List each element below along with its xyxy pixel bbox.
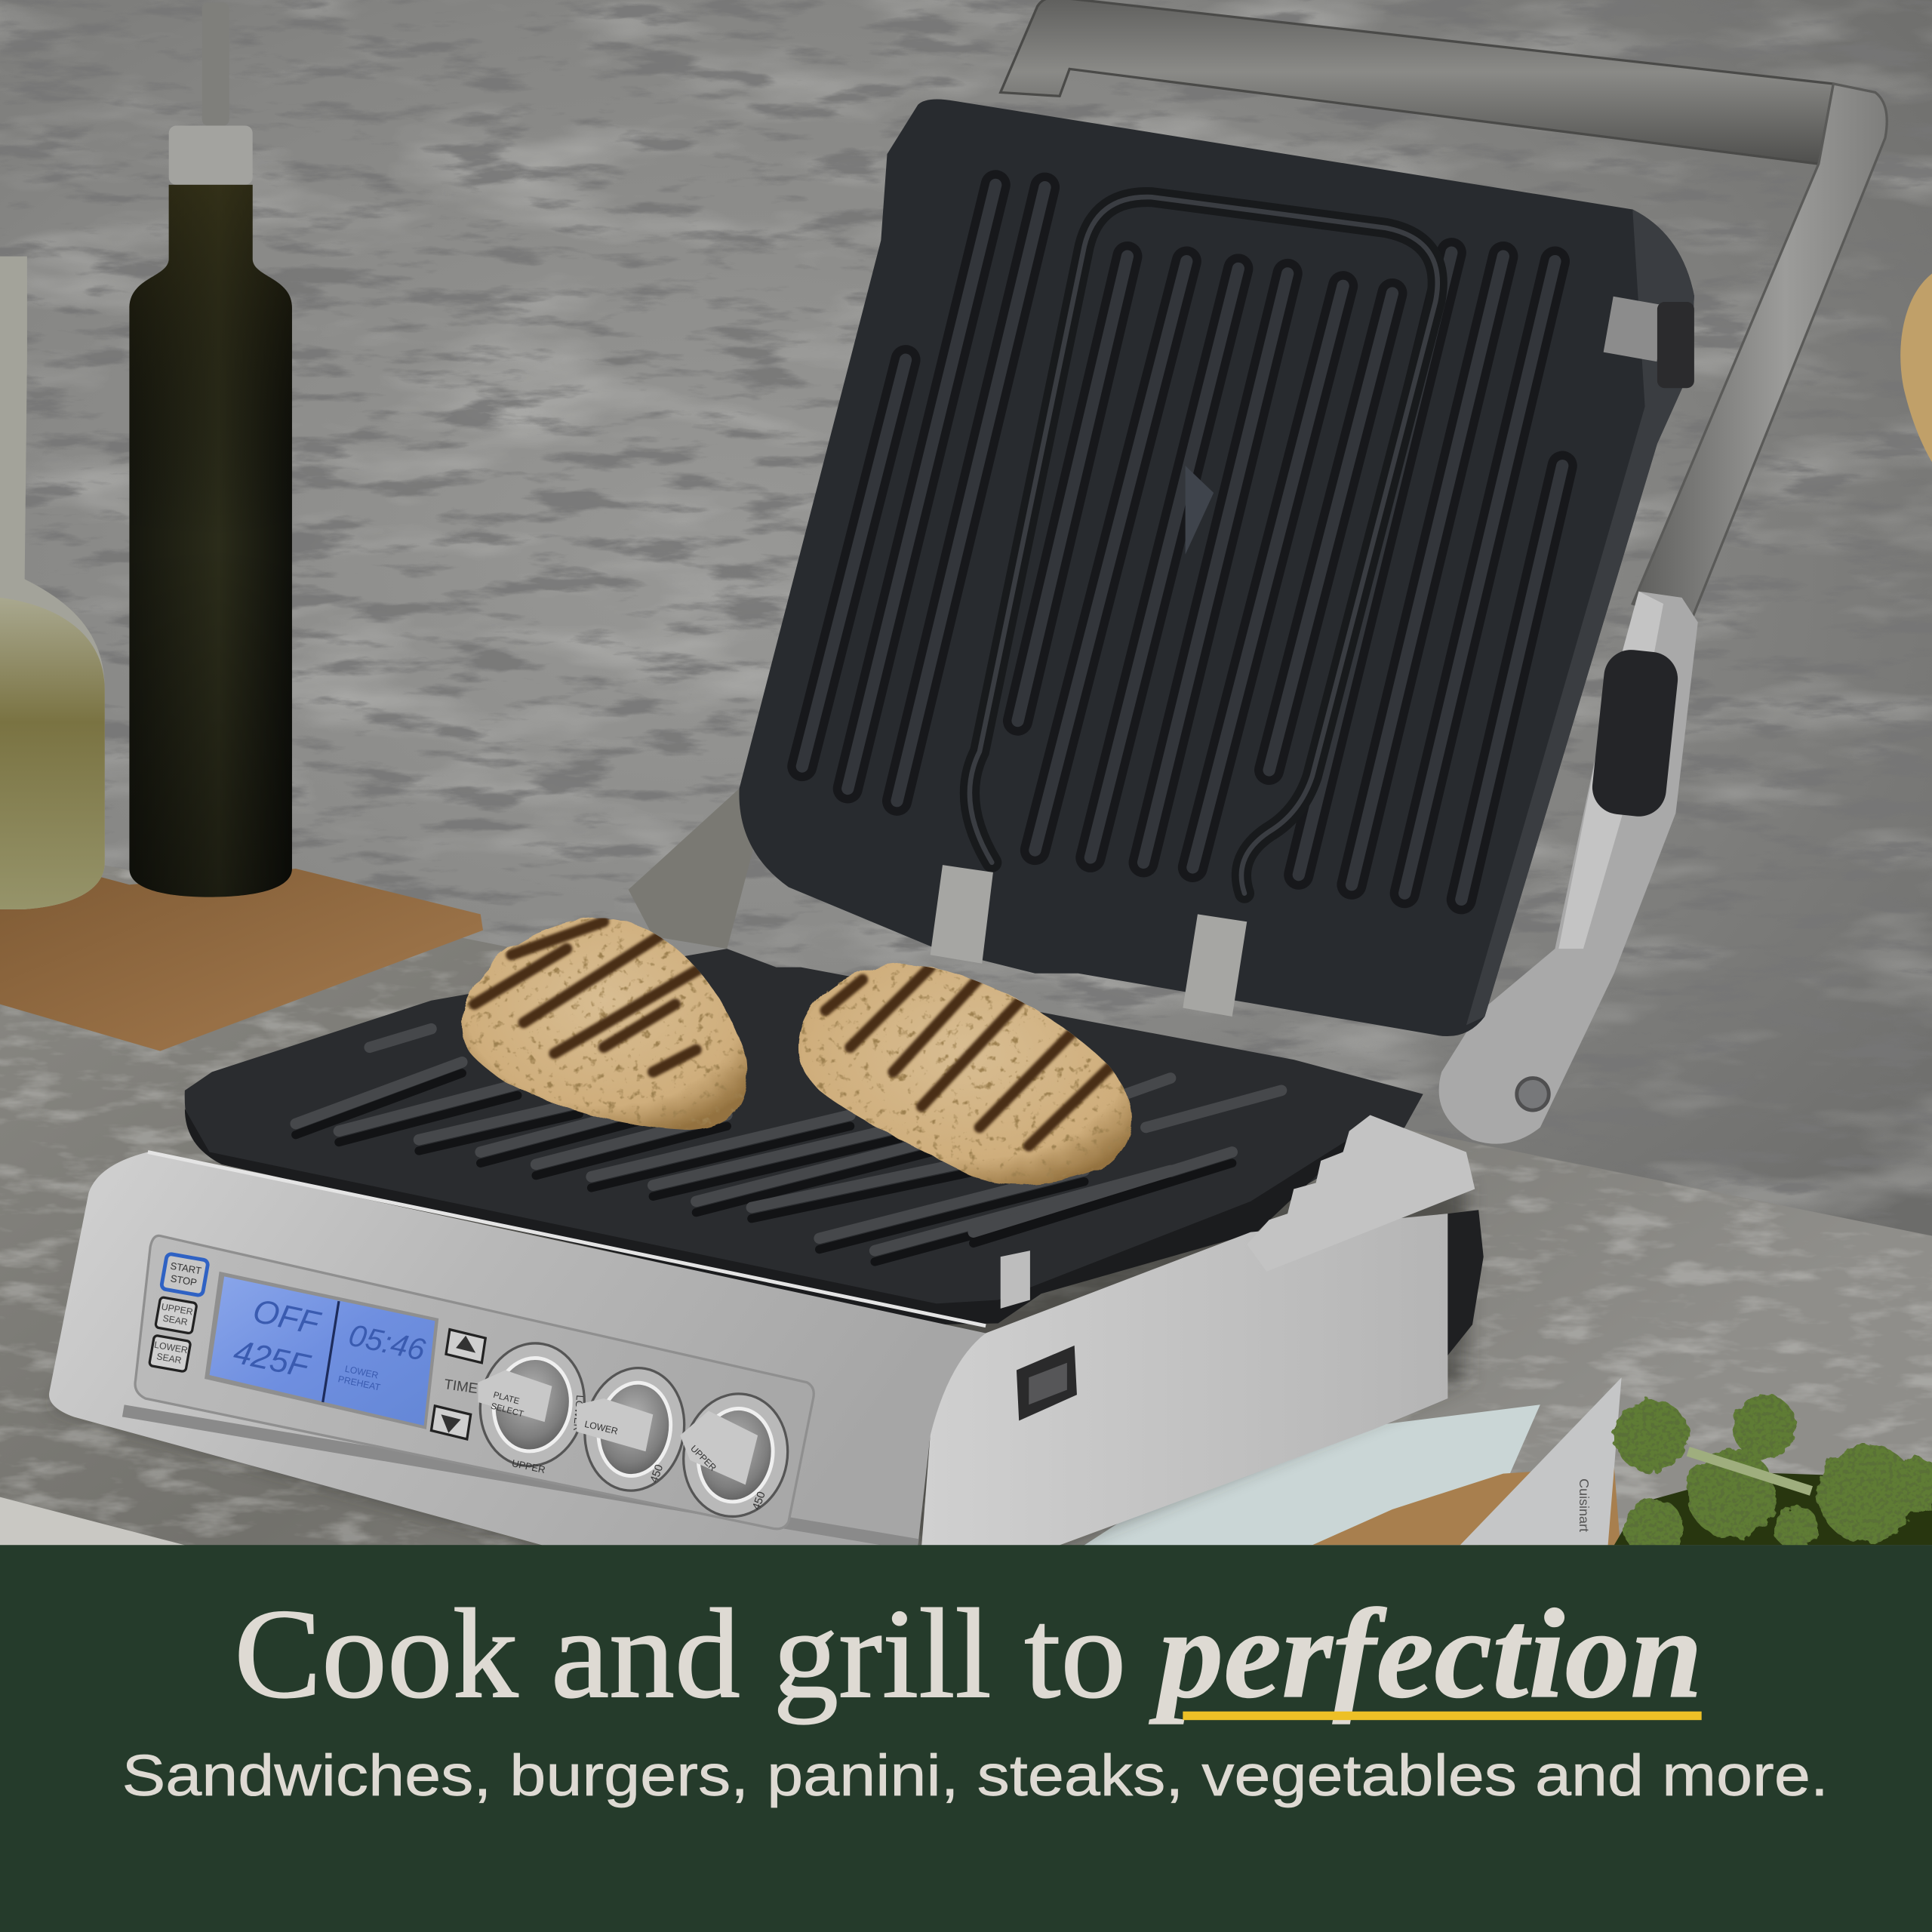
start stop button [161, 1254, 208, 1296]
lower temperature knob [575, 1360, 694, 1499]
lower temperature knob: 450 [648, 1463, 666, 1484]
LCD display: LOWER [344, 1364, 380, 1381]
headline: Cook and grill to [234, 1583, 1126, 1724]
glass oil bottle [0, 257, 105, 909]
upper sear button [155, 1297, 197, 1334]
upper temperature knob [674, 1386, 797, 1524]
wall [0, 0, 1932, 1244]
chef knife [1460, 1377, 1622, 1545]
lower cooking plate [185, 949, 1423, 1324]
plate select knob [471, 1335, 594, 1475]
timer buttons [431, 1330, 489, 1439]
plate clips [931, 865, 1247, 1017]
start stop button: STOP [170, 1272, 198, 1288]
LCD display: OFF [250, 1292, 324, 1343]
appliance base [49, 1152, 1484, 1545]
LCD display: PREHEAT [337, 1374, 382, 1393]
lower plate ridges [296, 1073, 1232, 1262]
caption band [0, 1545, 1932, 1932]
plate select knob: SELECT [490, 1401, 525, 1420]
LCD display: 425F [230, 1334, 314, 1386]
lid hinge arm [1439, 592, 1698, 1144]
lower sear button: SEAR [155, 1351, 183, 1366]
upper sear button: SEAR [162, 1313, 189, 1327]
wooden spoon [1900, 273, 1932, 462]
dark oil bottle [129, 2, 292, 897]
lower temperature knob: LOWER [583, 1419, 619, 1437]
black side latch [1589, 648, 1681, 819]
power switch [1017, 1346, 1077, 1420]
wooden board [0, 851, 483, 1051]
upper cooking plate [739, 100, 1694, 1036]
lower sear button: LOWER [153, 1340, 189, 1355]
serrated lid rack [1247, 1115, 1475, 1272]
control panel [135, 1235, 814, 1529]
upper temperature knob: 450 [750, 1490, 768, 1512]
headline: perfection [1148, 1583, 1703, 1724]
timer buttons: TIMER [443, 1376, 489, 1398]
LCD display [205, 1272, 438, 1429]
grill lid handle [1001, 0, 1887, 622]
cutting board bottom right [1312, 1466, 1620, 1545]
headline underline [1183, 1712, 1702, 1720]
broccoli [1614, 1395, 1932, 1558]
plate select knob: LOWER [571, 1395, 586, 1432]
start stop button: START [169, 1260, 202, 1277]
upper temperature knob: UPPER [688, 1443, 718, 1473]
LCD display: 05:46 [346, 1318, 429, 1367]
chef knife: Cuisinart [1577, 1478, 1592, 1532]
appliance shadow [49, 1158, 1466, 1545]
left rear hinge [629, 789, 758, 949]
headline [234, 1583, 1703, 1724]
plate select knob: UPPER [511, 1457, 546, 1475]
plate ridges [802, 185, 1562, 900]
countertop [0, 844, 1932, 1545]
grilled chicken breast right [789, 955, 1146, 1195]
upper sear button: UPPER [161, 1301, 194, 1317]
lower sear button [149, 1335, 191, 1372]
right plate latch [1001, 1251, 1030, 1309]
plate select knob: PLATE [492, 1391, 521, 1407]
grilled chicken breast left [456, 912, 752, 1134]
subheading: Sandwiches, burgers, panini, steaks, vegetables and more. [122, 1744, 1829, 1808]
